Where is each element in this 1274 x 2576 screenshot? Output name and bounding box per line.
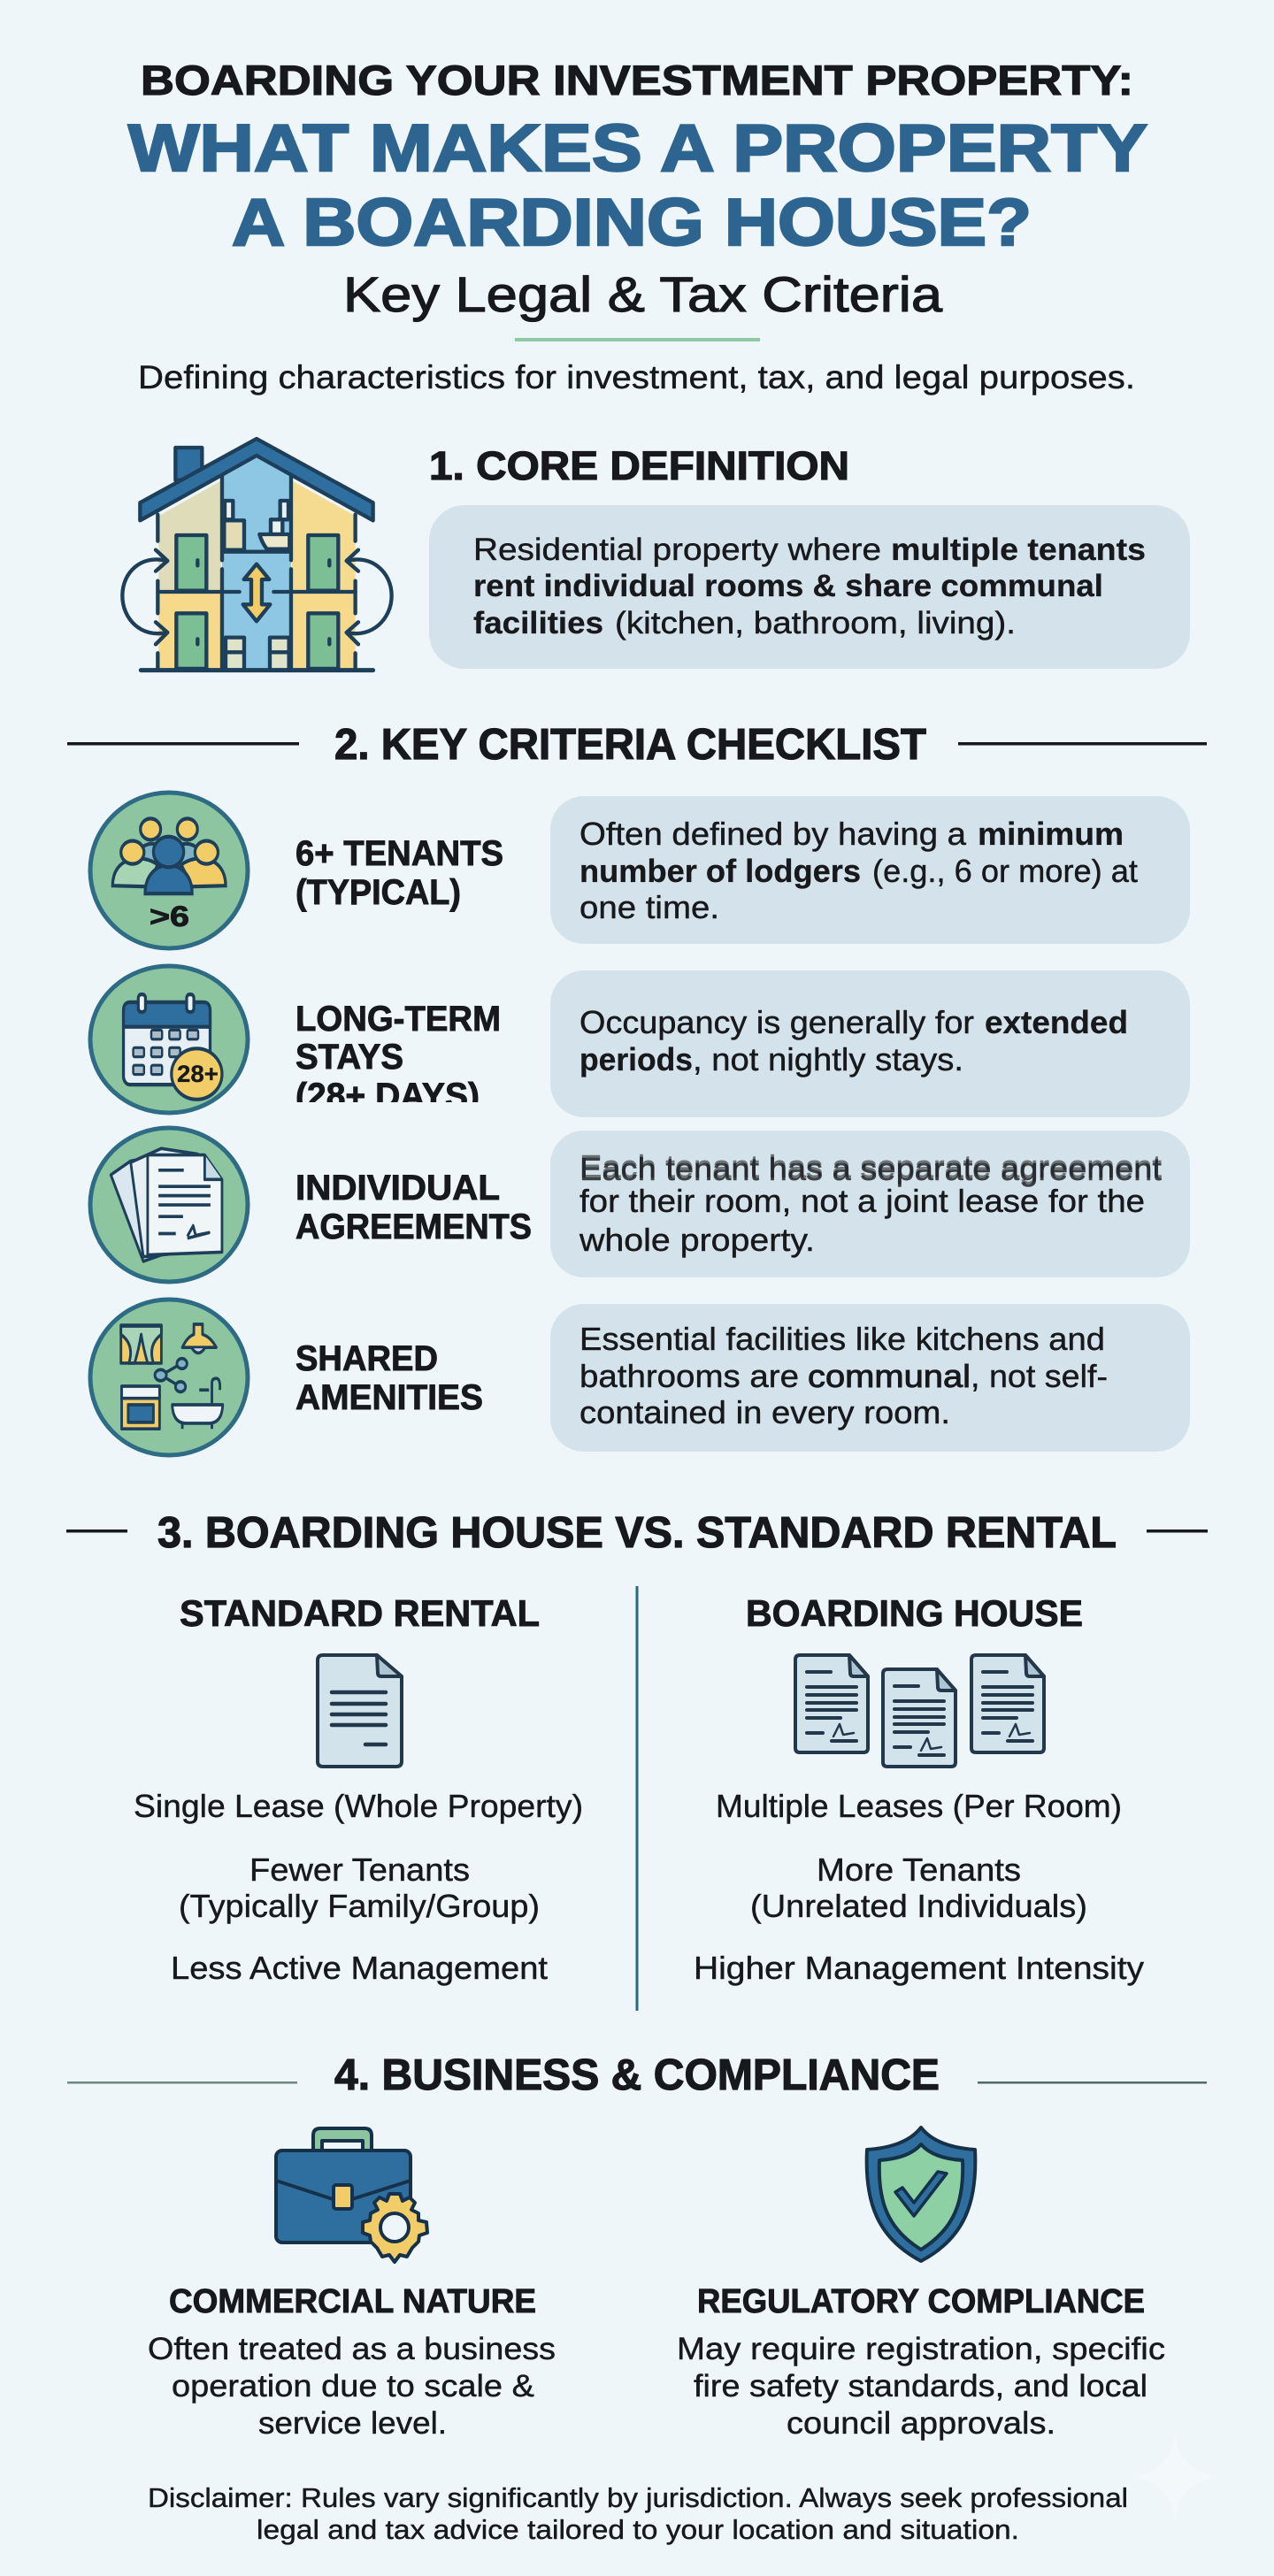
description: service level. bbox=[258, 2406, 447, 2441]
description: (e.g., 6 or more) at bbox=[872, 853, 1138, 889]
description bbox=[579, 1148, 1162, 1258]
criterion: individual agreements: AGREEMENTS bbox=[295, 1208, 532, 1246]
description: communal bbox=[808, 1358, 971, 1394]
icon: multiple lease documents bbox=[795, 1655, 1044, 1767]
description: operation due to scale & bbox=[172, 2369, 534, 2404]
definition text: multiple tenants bbox=[891, 533, 1146, 567]
icon: tenants group: >6 bbox=[150, 901, 189, 932]
description: Each tenant has a separate agreement bbox=[579, 1148, 1162, 1184]
label: LONG-TERM bbox=[295, 1000, 501, 1039]
description: Occupancy is generally for bbox=[579, 1004, 974, 1040]
section heading: key criteria checklist: 2. KEY CRITERIA CHECKLIST bbox=[334, 721, 926, 769]
description: one time. bbox=[579, 889, 719, 925]
disclaimer bbox=[148, 2482, 1128, 2545]
icon: calendar: 28+ bbox=[177, 1061, 219, 1087]
icon: single lease document bbox=[318, 1655, 402, 1767]
description: fire safety standards, and local bbox=[694, 2369, 1147, 2404]
title kicker: BOARDING YOUR INVESTMENT PROPERTY: bbox=[141, 57, 1133, 104]
comparison points: More Tenants bbox=[817, 1852, 1021, 1888]
description bbox=[579, 1004, 1128, 1077]
comparison points: Multiple Leases (Per Room) bbox=[716, 1788, 1122, 1824]
label: 6+ TENANTS bbox=[295, 834, 503, 873]
icon: shield with check bbox=[867, 2128, 975, 2261]
description bbox=[579, 816, 1138, 925]
description box bbox=[550, 970, 1190, 1117]
main title line 2: A BOARDING HOUSE? bbox=[232, 185, 1032, 259]
criterion: long-term stays: STAYS bbox=[295, 1038, 403, 1077]
section heading: key criteria checklist bbox=[67, 721, 1207, 769]
icon: shared facilities bbox=[90, 1300, 248, 1455]
accent rule bbox=[515, 338, 760, 341]
description: number of lodgers bbox=[579, 853, 861, 889]
comparison points: Fewer Tenants bbox=[249, 1852, 470, 1888]
description: Each tenant has a separate agreement bbox=[579, 1151, 1162, 1187]
definition text: rent individual rooms & share communal bbox=[473, 569, 1103, 603]
criterion: 6+ tenants: (TYPICAL) bbox=[295, 873, 461, 912]
panel: standard rental bbox=[134, 1592, 583, 1986]
description: council approvals. bbox=[787, 2406, 1055, 2441]
description: bathrooms are bbox=[579, 1358, 799, 1394]
description bbox=[677, 2332, 1165, 2441]
comparison points bbox=[694, 1788, 1144, 1986]
description: May require registration, specific bbox=[677, 2332, 1165, 2366]
description box bbox=[550, 1304, 1190, 1452]
subtitle: Key Legal & Tax Criteria bbox=[343, 266, 943, 322]
definition text: (kitchen, bathroom, living). bbox=[615, 606, 1016, 640]
description: extended bbox=[985, 1004, 1128, 1040]
description: periods bbox=[579, 1041, 693, 1077]
heading: COMMERCIAL NATURE bbox=[169, 2283, 536, 2320]
panel: boarding house bbox=[694, 1592, 1144, 1986]
section heading: business and compliance: 4. BUSINESS & COMPLIANCE bbox=[334, 2051, 940, 2099]
comparison points: (Typically Family/Group) bbox=[179, 1888, 540, 1924]
criterion: long-term stays bbox=[90, 966, 1190, 1117]
column heading: STANDARD RENTAL bbox=[180, 1592, 540, 1634]
definition text bbox=[473, 533, 1146, 640]
criterion: 6+ tenants bbox=[90, 793, 1190, 948]
description bbox=[579, 1321, 1108, 1430]
label: INDIVIDUAL bbox=[295, 1169, 500, 1208]
description: minimum bbox=[978, 816, 1124, 852]
comparison points bbox=[134, 1788, 583, 1986]
description: Often treated as a business bbox=[148, 2332, 556, 2366]
disclaimer: Disclaimer: Rules vary significantly by jurisdiction. Always seek professional bbox=[148, 2482, 1128, 2513]
header bbox=[128, 57, 1147, 395]
description box bbox=[550, 796, 1190, 944]
description: , not self- bbox=[971, 1358, 1108, 1394]
section heading: boarding house vs standard rental: 3. BOARDING HOUSE VS. STANDARD RENTAL bbox=[157, 1509, 1117, 1557]
criterion: long-term stays: (28+ DAYS) bbox=[295, 1077, 480, 1116]
description: , not nightly stays. bbox=[693, 1041, 963, 1077]
column heading: BOARDING HOUSE bbox=[746, 1592, 1083, 1634]
definition text: Residential property where bbox=[473, 533, 881, 567]
icon: agreements stack bbox=[90, 1128, 248, 1282]
tagline: Defining characteristics for investment, tax, and legal purposes. bbox=[138, 359, 1135, 395]
panel: regulatory compliance bbox=[677, 2128, 1165, 2441]
description: contained in every room. bbox=[579, 1394, 950, 1430]
criterion: shared amenities bbox=[90, 1300, 1190, 1455]
criterion: individual agreements bbox=[90, 1128, 1190, 1282]
icon: boarding house cross-section bbox=[122, 439, 392, 671]
icon: tenants group bbox=[90, 793, 248, 948]
panel: core definition bbox=[429, 443, 1190, 669]
comparison points: (Unrelated Individuals) bbox=[750, 1888, 1087, 1924]
criterion: shared amenities: AMENITIES bbox=[295, 1378, 483, 1417]
heading: REGULATORY COMPLIANCE bbox=[697, 2283, 1145, 2320]
comparison divider bbox=[635, 1586, 639, 2011]
heading: core definition: 1. CORE DEFINITION bbox=[429, 443, 849, 488]
description bbox=[148, 2332, 556, 2441]
description: Essential facilities like kitchens and bbox=[579, 1321, 1105, 1357]
definition box bbox=[429, 505, 1190, 669]
description: Often defined by having a bbox=[579, 816, 967, 852]
panel: commercial nature bbox=[148, 2128, 556, 2441]
description box bbox=[550, 1131, 1190, 1277]
main title line 1: WHAT MAKES A PROPERTY bbox=[128, 111, 1147, 185]
comparison points: Higher Management Intensity bbox=[694, 1950, 1144, 1986]
label: SHARED bbox=[295, 1339, 438, 1378]
comparison points: Less Active Management bbox=[171, 1950, 548, 1986]
icon: calendar bbox=[90, 966, 248, 1113]
definition text: facilities bbox=[473, 606, 603, 640]
description: for their room, not a joint lease for the bbox=[579, 1183, 1145, 1219]
comparison points: Single Lease (Whole Property) bbox=[134, 1788, 583, 1824]
description: whole property. bbox=[579, 1222, 815, 1258]
disclaimer: legal and tax advice tailored to your location and situation. bbox=[257, 2514, 1019, 2545]
icon: watermark sparkle bbox=[1132, 2434, 1217, 2519]
icon: briefcase with gear bbox=[276, 2128, 427, 2262]
